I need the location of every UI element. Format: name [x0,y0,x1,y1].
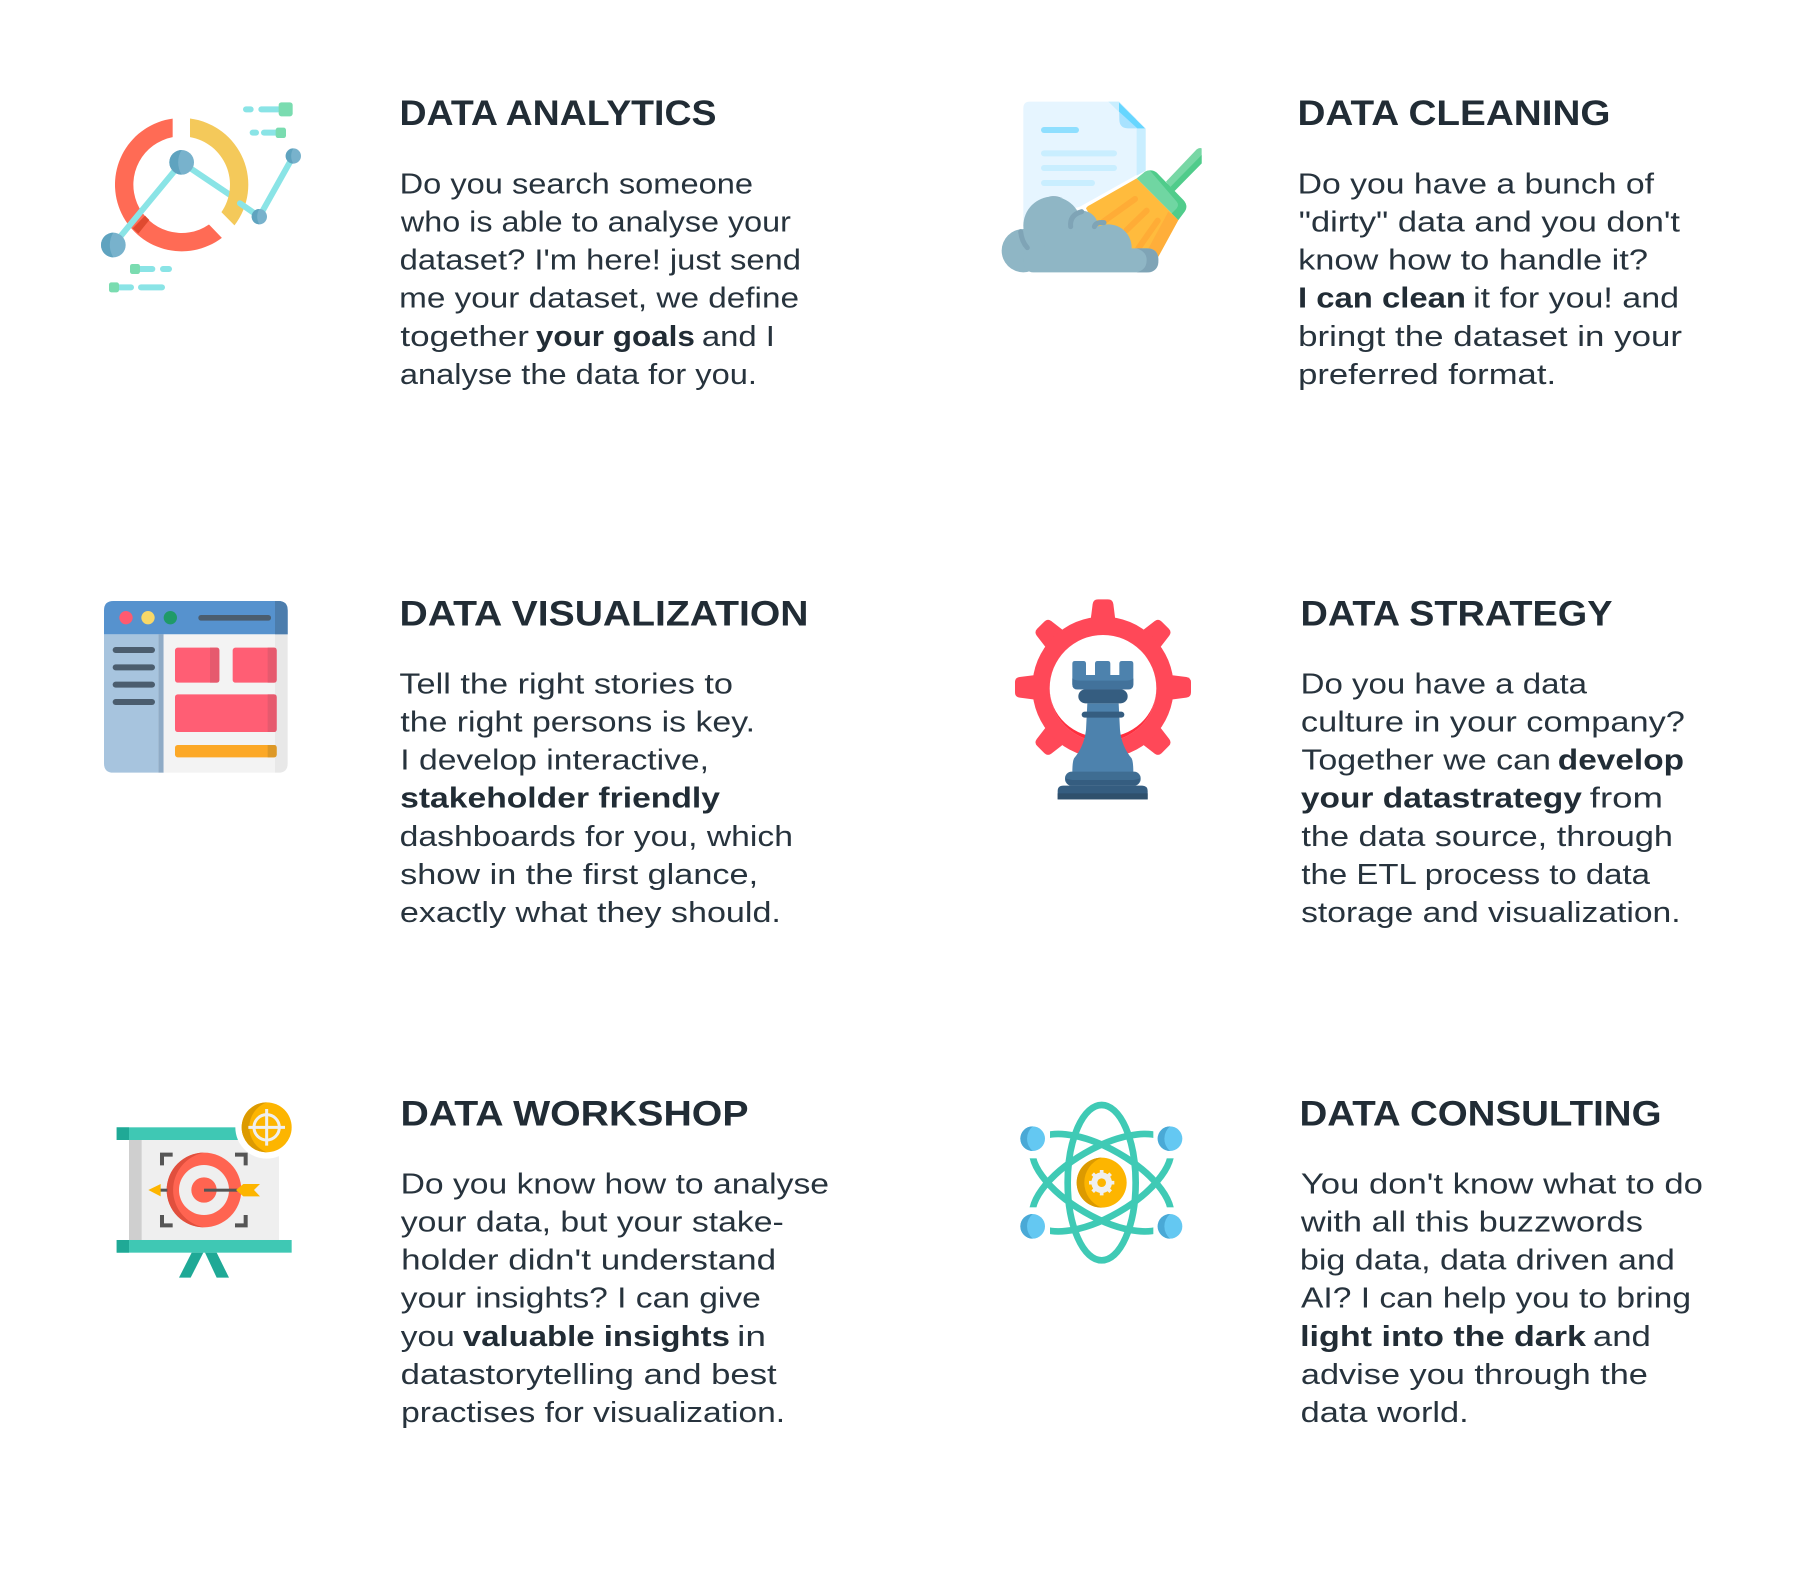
body text: "dirty" data and you don't [1299,206,1680,238]
body text: light into the dark [1300,1321,1587,1353]
panel: data analytics [101,94,801,391]
body text: advise you through the [1301,1359,1648,1391]
body text: preferred format. [1298,359,1556,391]
body text: know how to handle it? [1298,245,1648,277]
body text: practises for visualization. [401,1397,785,1429]
body text: culture in your company? [1301,706,1685,738]
body text [399,668,793,929]
body text: me your dataset, we define [399,283,799,315]
body text: data world. [1301,1397,1469,1429]
icon: presentation board with target [117,1096,298,1278]
body text: holder didn't understand [401,1245,776,1277]
body text: the ETL process to data [1301,859,1651,891]
body text: I can clean [1298,283,1466,315]
body text: storage and visualization. [1301,897,1681,929]
body text: analyse the data for you. [400,359,757,391]
body text: Do you have a data [1301,668,1588,700]
body text: show in the first glance, [400,859,758,891]
body text [401,1168,829,1429]
heading: DATA CLEANING [1298,94,1610,133]
body text: and I [702,321,775,353]
body text: big data, data driven and [1300,1245,1675,1277]
body text: who is able to analyse your [400,206,791,238]
body text: bringt the dataset in your [1298,321,1682,353]
icon: atom with gear [1010,1090,1193,1274]
body text: Do you know how to analyse [401,1168,829,1200]
icon: document, broom and dust cloud [1002,102,1202,272]
body text: your goals [536,321,695,353]
panel: data consulting [1010,1090,1703,1429]
body text: You don't know what to do [1301,1168,1703,1200]
heading: DATA VISUALIZATION [400,595,808,634]
panel: data cleaning [1002,94,1682,391]
body text [399,168,801,391]
heading: DATA WORKSHOP [400,1095,748,1134]
body text: with all this buzzwords [1300,1206,1643,1238]
body text: it for you! and [1473,283,1679,315]
body text: your data, but your stake- [401,1206,784,1238]
body text [1298,168,1682,391]
heading: DATA CONSULTING [1300,1095,1662,1134]
body text: and [1593,1321,1651,1353]
panel: data workshop [117,1095,829,1429]
body text: you [401,1321,455,1353]
body text: from [1590,783,1663,815]
icon: donut chart with line graph [101,102,301,292]
body text: Together we can [1301,745,1551,777]
heading: DATA ANALYTICS [400,94,716,133]
body text: develop [1558,745,1684,777]
body text: Tell the right stories to [399,668,733,700]
panel: data visualization [104,595,808,929]
body text: I develop interactive, [400,745,709,777]
body text: dashboards for you, which [400,821,793,853]
body text: datastorytelling and best [401,1359,777,1391]
body text: exactly what they should. [400,897,781,929]
body text [1300,1168,1703,1429]
body text: in [737,1321,766,1353]
body text: Do you search someone [400,168,753,200]
panel: data strategy [1015,595,1685,929]
body text: dataset? I'm here! just send [400,245,801,277]
icon: gear with chess rook [1015,599,1191,799]
body text: the right persons is key. [400,706,755,738]
heading: DATA STRATEGY [1300,595,1612,634]
body text: together [400,321,529,353]
body text: stakeholder friendly [400,783,720,815]
body text: valuable insights [463,1321,730,1353]
body text [1301,668,1685,929]
body text: the data source, through [1301,821,1673,853]
body text: AI? I can help you to bring [1301,1283,1691,1315]
body text: Do you have a bunch of [1298,168,1655,200]
body text: your datastrategy [1301,783,1582,815]
body text: your insights? I can give [401,1283,761,1315]
icon: dashboard browser window [104,601,288,773]
